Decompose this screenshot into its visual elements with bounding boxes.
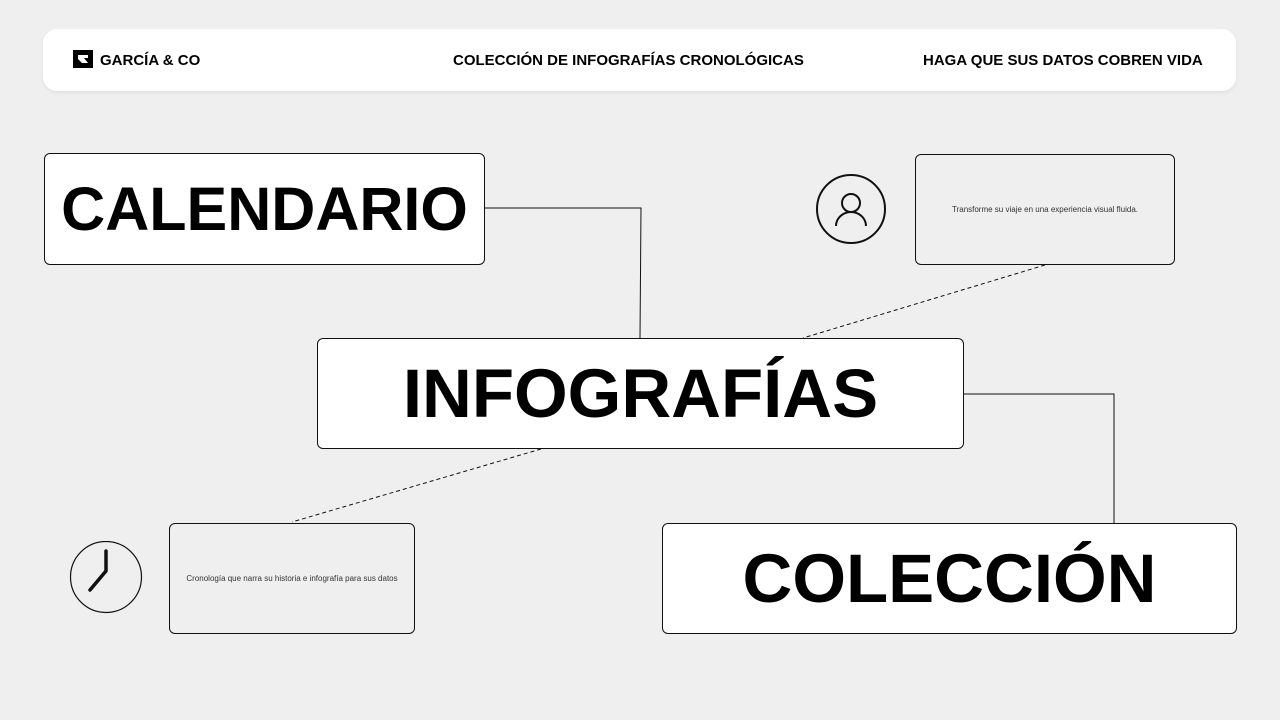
icon: clock	[70, 541, 142, 614]
header right text: HAGA QUE SUS DATOS COBREN VIDA	[923, 52, 1203, 69]
icon: logo mark	[73, 50, 93, 68]
callout: person text	[915, 154, 1175, 265]
header bar	[43, 29, 1236, 91]
box: CALENDARIO	[44, 153, 485, 265]
callout: clock text	[169, 523, 415, 634]
box: COLECCIÓN	[662, 523, 1237, 634]
box: COLECCIÓN: COLECCIÓN	[742, 540, 1156, 617]
box: INFOGRAFÍAS: INFOGRAFÍAS	[403, 355, 878, 432]
box: CALENDARIO: CALENDARIO	[61, 175, 468, 243]
callout: person text: Transforme su viaje en una experiencia visual fluida.	[952, 205, 1138, 214]
icon: person	[816, 174, 886, 244]
header center text: COLECCIÓN DE INFOGRAFÍAS CRONOLÓGICAS	[453, 52, 804, 69]
box: INFOGRAFÍAS	[317, 338, 964, 449]
callout: clock text: Cronología que narra su historia e infografía para sus datos	[186, 574, 398, 583]
logo	[73, 50, 200, 69]
brand name: GARCÍA & CO	[100, 52, 200, 69]
